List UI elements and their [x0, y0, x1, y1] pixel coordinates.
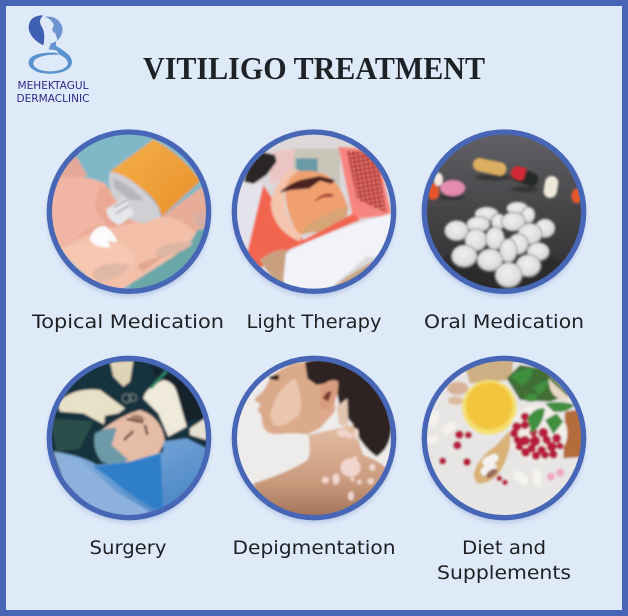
label: line 1: Diet and [462, 537, 546, 559]
panel: depigmentation [230, 355, 400, 559]
logo: Mehektagul Dermaclinic [16, 15, 90, 105]
label: line 2: Supplements [437, 562, 571, 584]
photo: woman with vitiligo patches on neck and back [230, 355, 400, 523]
photo: ointment tube on fingers [43, 127, 217, 297]
panel: light therapy [230, 127, 400, 333]
panel: surgery [43, 355, 217, 559]
photo: lemon, cranberries, mint and supplements [420, 355, 590, 523]
panel: topical medication [31, 127, 224, 333]
label: Surgery [90, 537, 166, 559]
logo mark [29, 15, 72, 74]
title: VITILIGO TREATMENT [143, 50, 485, 86]
logo text line 2: DERMACLINIC [16, 93, 90, 105]
panel: oral medication [420, 127, 590, 333]
photo: surgeons operating on patient's face [43, 355, 217, 523]
panel: diet and supplements [420, 355, 590, 584]
label: Depigmentation [232, 537, 396, 559]
label: Topical Medication [31, 311, 224, 333]
photo: white tablets and capsules on slate [420, 127, 590, 297]
label: Oral Medication [424, 311, 584, 333]
logo text line 1: MEHEKTAGUL [18, 80, 89, 92]
label: Light Therapy [246, 311, 382, 333]
photo: LED light therapy on face [230, 127, 400, 297]
